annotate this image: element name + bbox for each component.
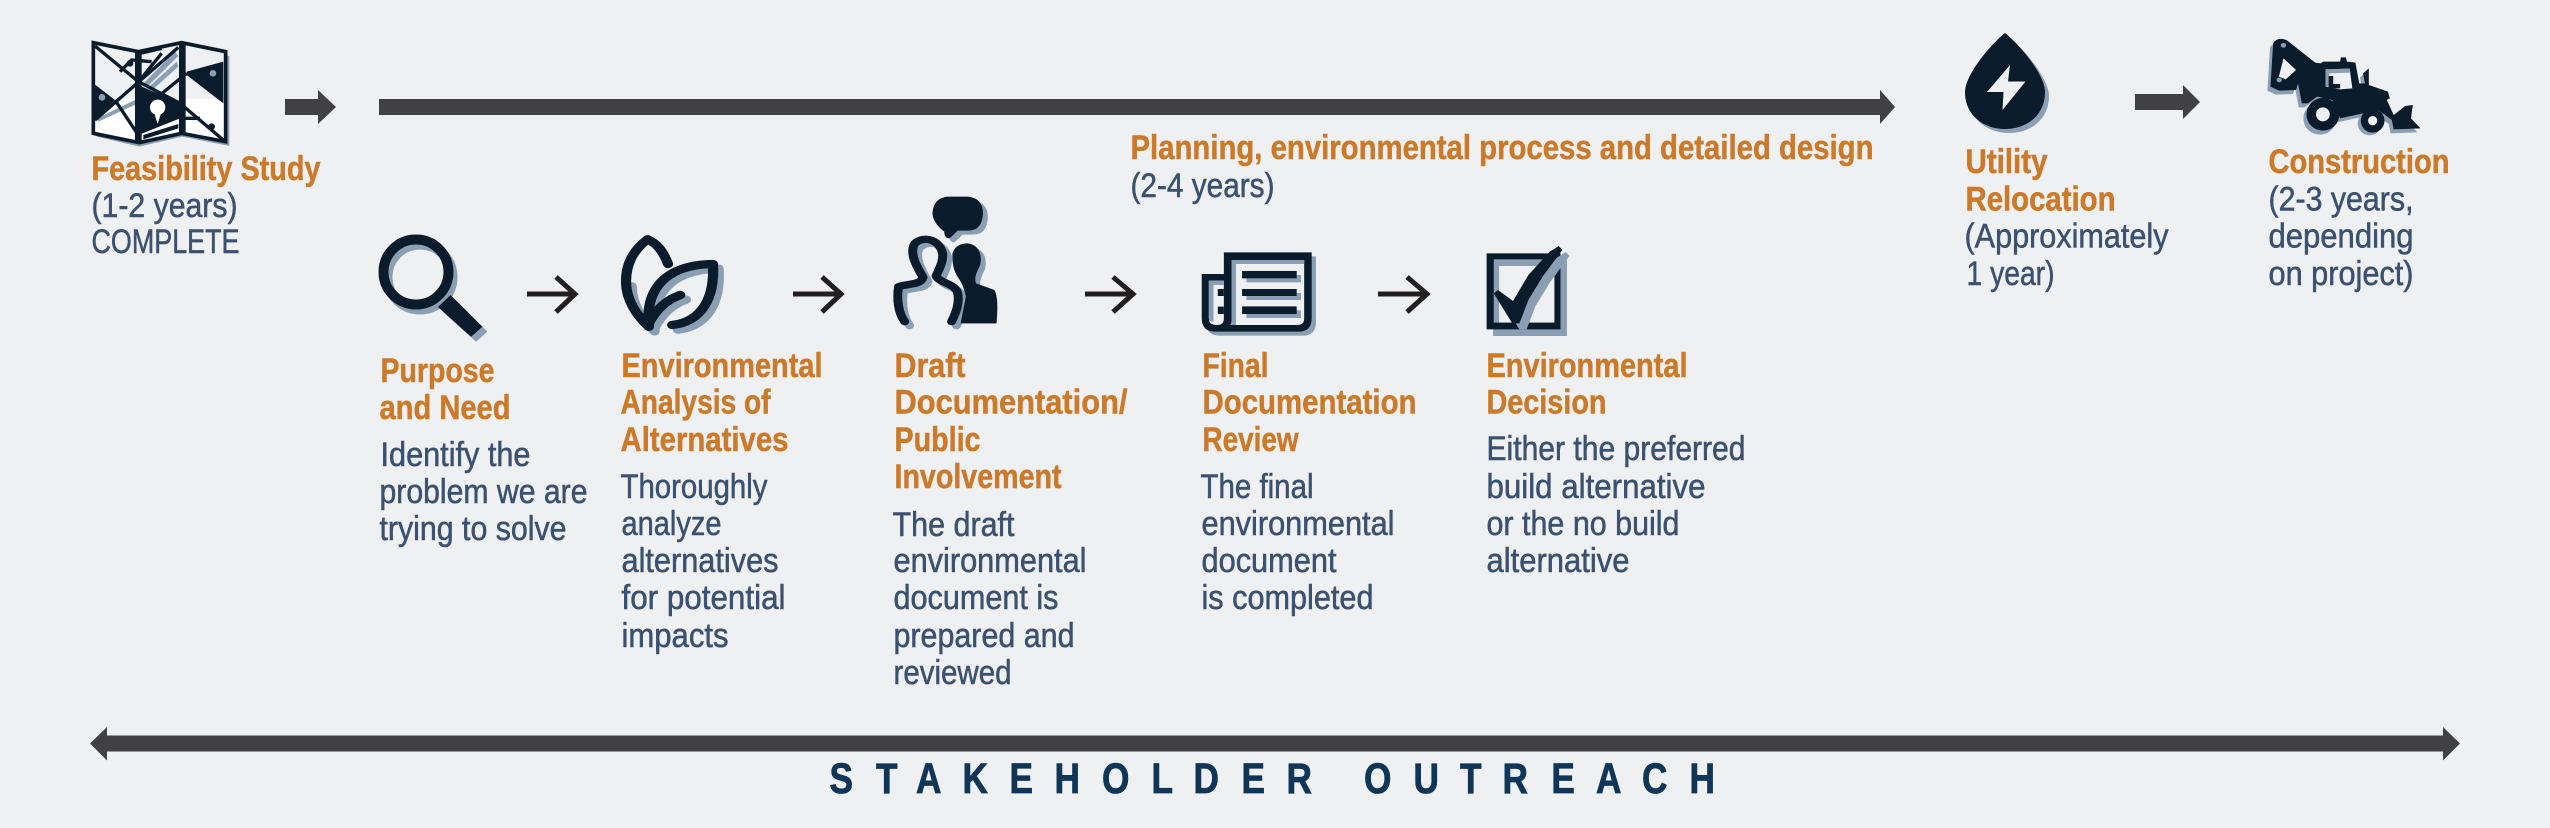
step: purpose and need	[380, 352, 588, 548]
description: final documentation review: document	[1202, 542, 1337, 580]
step: environmental decision	[1486, 347, 1746, 580]
description: environmental analysis: for potential	[622, 579, 786, 617]
arrow: feasibility to planning	[285, 90, 336, 124]
icon: magnifying glass	[384, 240, 487, 342]
duration: 2-4 years: (2-4 years)	[1130, 167, 1274, 205]
status: complete: COMPLETE	[92, 223, 240, 261]
arrow: purpose to analysis	[527, 277, 575, 312]
description: environmental decision: build alternative	[1486, 468, 1706, 506]
icon: newspaper	[1202, 252, 1316, 336]
description: environmental decision	[1486, 430, 1746, 580]
duration: 2-3 years: depending	[2268, 218, 2414, 256]
heading: draft documentation / public involvement: Documentation/	[894, 384, 1128, 422]
description: draft documentation: prepared and	[894, 617, 1074, 655]
description: draft documentation: document is	[894, 579, 1058, 617]
description: purpose and need: trying to solve	[380, 510, 566, 548]
description: purpose and need: Identify the	[380, 436, 530, 474]
step: final documentation review	[1200, 347, 1416, 617]
heading: draft documentation / public involvement: Draft	[894, 347, 966, 385]
heading: purpose and need: Purpose	[380, 352, 494, 390]
step: draft documentation	[892, 347, 1128, 692]
step: environmental analysis	[620, 347, 822, 655]
icon: checkbox	[1487, 246, 1569, 336]
description: environmental analysis	[620, 468, 786, 655]
description: environmental analysis: Thoroughly	[620, 468, 768, 506]
duration: 2-3 years: on project)	[2268, 255, 2414, 293]
duration: 2-3 years: (2-3 years,	[2268, 180, 2414, 218]
description: purpose and need: problem we are	[380, 473, 588, 511]
description: environmental decision: Either the preferred	[1486, 430, 1746, 468]
description: draft documentation: environmental	[894, 542, 1086, 580]
arrow: stakeholder outreach double-headed	[90, 727, 2460, 760]
heading: final documentation review: Review	[1202, 421, 1299, 459]
description: draft documentation: The draft	[892, 506, 1015, 544]
icon: folded map	[93, 43, 229, 147]
duration: 1-2 years: (1-2 years)	[92, 187, 238, 225]
description: final documentation review: environmental	[1202, 505, 1394, 543]
heading: draft documentation / public involvement: Public	[894, 421, 980, 459]
description: final documentation review: is completed	[1202, 579, 1374, 617]
heading: final documentation review	[1202, 347, 1416, 459]
arrow: utility to construction	[2135, 85, 2200, 119]
heading: environmental decision	[1486, 347, 1688, 422]
heading: utility relocation	[1966, 143, 2116, 218]
icon: utility drop with bolt	[1965, 33, 2049, 133]
duration: approximately 1 year	[1964, 218, 2168, 293]
icon: backhoe	[2267, 39, 2420, 135]
arrow: analysis to draft	[793, 277, 841, 312]
icon: people with speech bubble	[898, 197, 998, 326]
description: draft documentation: reviewed	[894, 654, 1012, 692]
heading: environmental analysis of alternatives: Environmental	[622, 347, 822, 385]
duration: approximately 1 year: 1 year)	[1966, 255, 2054, 293]
heading: environmental decision: Decision	[1486, 384, 1606, 422]
heading: environmental analysis of alternatives: Alternatives	[620, 421, 788, 459]
duration: approximately 1 year: (Approximately	[1964, 218, 2168, 256]
heading: purpose and need: and Need	[380, 389, 510, 427]
heading: draft documentation / public involvement	[894, 347, 1128, 496]
description: final documentation review	[1200, 468, 1394, 617]
duration: 2-3 years	[2268, 180, 2414, 293]
description: purpose and need	[380, 436, 588, 548]
heading: draft documentation / public involvement: Involvement	[894, 458, 1062, 496]
arrow: draft to final	[1085, 277, 1133, 312]
description: environmental analysis: analyze	[622, 505, 722, 543]
description: environmental decision: or the no build	[1486, 505, 1680, 543]
feasibility study text	[92, 150, 321, 261]
heading: utility relocation: Relocation	[1966, 180, 2116, 218]
description: environmental analysis: impacts	[622, 617, 728, 655]
description: final documentation review: The final	[1200, 468, 1314, 506]
heading: environmental analysis of alternatives	[620, 347, 822, 459]
heading: construction: Construction	[2268, 143, 2450, 181]
heading: final documentation review: Documentation	[1202, 384, 1416, 422]
utility relocation text	[1964, 143, 2168, 293]
construction text	[2268, 143, 2450, 293]
heading: purpose and need	[380, 352, 510, 427]
label: stakeholder outreach: STAKEHOLDER OUTREACH	[830, 755, 1715, 803]
description: environmental decision: alternative	[1486, 542, 1630, 580]
heading: environmental analysis of alternatives: Analysis of	[620, 384, 771, 422]
heading: environmental decision: Environmental	[1486, 347, 1688, 385]
planning heading text	[1130, 129, 1874, 205]
arrow: final to decision	[1378, 277, 1427, 312]
arrow: planning timeline	[379, 90, 1895, 124]
heading: final documentation review: Final	[1202, 347, 1268, 385]
description: draft documentation	[892, 506, 1086, 692]
description: environmental analysis: alternatives	[622, 542, 778, 580]
heading: utility relocation: Utility	[1966, 143, 2048, 181]
icon: leaves	[626, 239, 719, 331]
heading: feasibility study: Feasibility Study	[92, 150, 321, 188]
heading: planning: Planning, environmental process and detailed design	[1130, 129, 1874, 167]
